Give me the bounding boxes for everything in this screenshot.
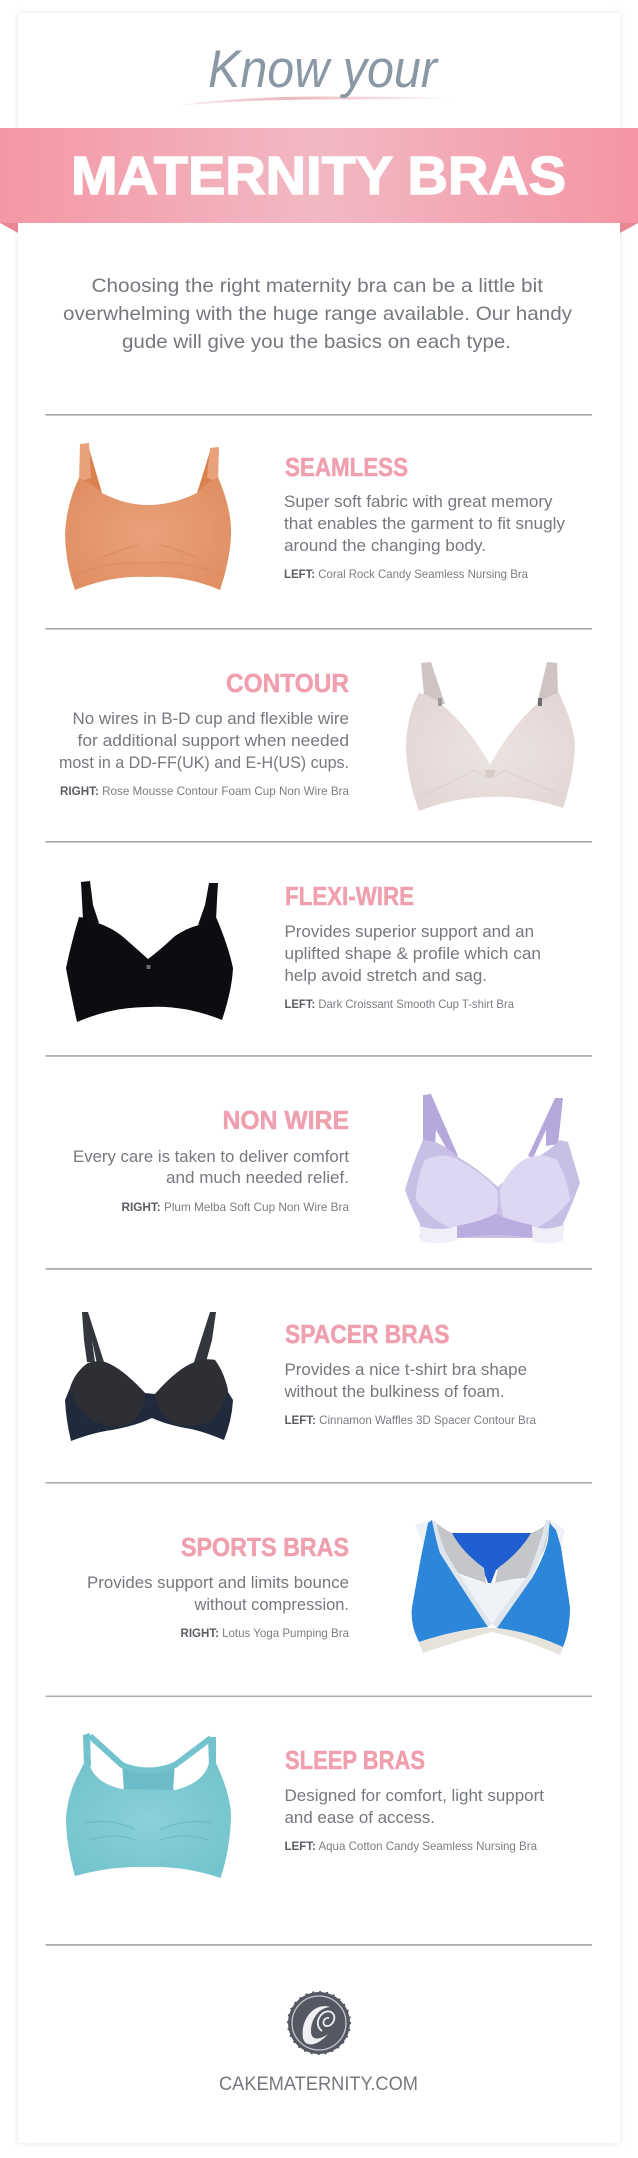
bra: coral seamless [65, 443, 231, 590]
credit: RIGHT: Plum Melba Soft Cup Non Wire Bra [122, 1200, 349, 1214]
panel: contour [59, 662, 575, 811]
underline swoosh [180, 96, 454, 106]
description [283, 1361, 527, 1401]
heading: SEAMLESS [285, 452, 408, 482]
description: uplifted shape & profile which can [284, 945, 541, 963]
bra: dark croissant [66, 881, 233, 1022]
bra: rose contour [406, 662, 575, 811]
title: know your [180, 40, 454, 106]
credit: LEFT: Cinnamon Waffles 3D Spacer Contour Bra [284, 1413, 536, 1427]
panel: sports bras [87, 1520, 570, 1655]
description [284, 493, 566, 555]
bra: plum melba [405, 1094, 580, 1244]
description: without compression. [194, 1596, 349, 1614]
bra: aqua cotton candy [66, 1733, 231, 1878]
description: Super soft fabric with great memory [284, 493, 553, 511]
description [284, 923, 541, 985]
credit: RIGHT: Rose Mousse Contour Foam Cup Non Wire Bra [60, 784, 349, 798]
description [59, 710, 349, 772]
ribbon fold right [620, 223, 638, 233]
panel: flexi-wire [66, 881, 541, 1022]
description [87, 1574, 349, 1614]
intro text: overwhelming with the huge range available. Our handy [63, 303, 572, 325]
credit: LEFT: Coral Rock Candy Seamless Nursing Bra [284, 567, 528, 581]
main heading: MATERNITY BRAS [71, 146, 566, 206]
credit: LEFT: Aqua Cotton Candy Seamless Nursing Bra [284, 1839, 537, 1853]
ribbon fold left [0, 223, 18, 233]
intro text: gude will give you the basics on each type. [122, 331, 511, 353]
description: without the bulkiness of foam. [283, 1383, 504, 1401]
panel: seamless [65, 443, 566, 590]
description [284, 1787, 544, 1827]
ribbon band [0, 128, 638, 223]
credit: LEFT: Dark Croissant Smooth Cup T-shirt Bra [284, 997, 514, 1011]
intro text: Choosing the right maternity bra can be a little bit [92, 275, 544, 297]
heading: SPACER BRAS [285, 1319, 450, 1349]
description: Provides a nice t-shirt bra shape [284, 1361, 527, 1379]
description [73, 1148, 349, 1187]
heading: SPORTS BRAS [181, 1532, 349, 1562]
intro text [63, 275, 572, 353]
ribbon banner [0, 128, 638, 233]
description: and ease of access. [284, 1809, 435, 1827]
description: most in a DD-FF(UK) and E-H(US) cups. [59, 754, 349, 772]
description: Provides support and limits bounce [87, 1574, 349, 1592]
credit: RIGHT: Lotus Yoga Pumping Bra [180, 1626, 349, 1640]
description: for additional support when needed [78, 732, 349, 750]
panel: spacer bras [65, 1312, 536, 1441]
panel: non wire [73, 1094, 580, 1244]
heading: FLEXI-WIRE [285, 881, 414, 911]
heading: NON WIRE [222, 1105, 349, 1135]
heading: SLEEP BRAS [285, 1745, 425, 1775]
bra: cinnamon waffles [65, 1312, 233, 1441]
description: that enables the garment to fit snugly [284, 515, 566, 533]
panel: sleep bras [66, 1733, 544, 1878]
script heading: Know your [208, 40, 439, 99]
description: help avoid stretch and sag. [284, 967, 487, 985]
description: and much needed relief. [166, 1169, 349, 1187]
description: Designed for comfort, light support [284, 1787, 544, 1805]
description: No wires in B-D cup and flexible wire [72, 710, 349, 728]
bra: lotus yoga [412, 1520, 570, 1655]
description: Every care is taken to deliver comfort [73, 1148, 349, 1166]
footer logo [288, 1992, 350, 2054]
heading: CONTOUR [226, 668, 349, 698]
description: Provides superior support and an [284, 923, 534, 941]
footer url: CAKEMATERNITY.COM [219, 2073, 418, 2095]
description: around the changing body. [284, 537, 486, 555]
